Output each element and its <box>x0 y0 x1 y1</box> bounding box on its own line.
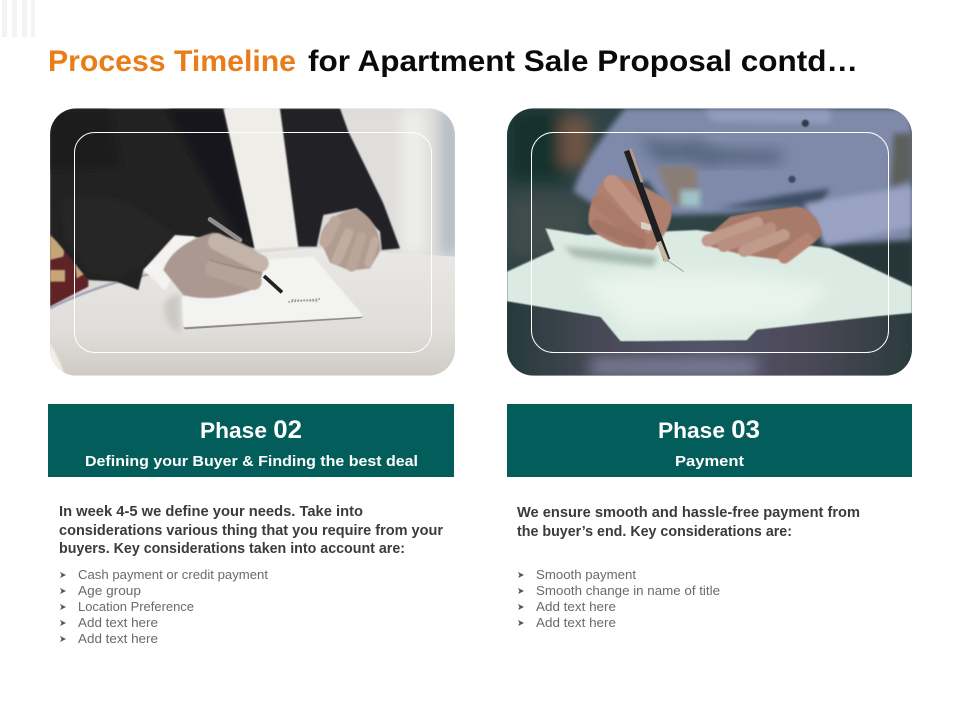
text block: phase 03 description <box>517 505 860 540</box>
subheading: phase 03: Payment <box>675 453 744 470</box>
text block: phase 02 description: In week 4-5 we define your needs. Take into <box>59 504 363 520</box>
bullet list: phase 02 considerations: Add text here <box>78 616 158 630</box>
text block: phase 02 description: buyers. Key considerations taken into account are: <box>59 541 405 557</box>
photo: man writing on paper <box>507 108 912 376</box>
bullet list: phase 02 considerations: Location Preference <box>78 600 194 614</box>
panel: phase 03 banner <box>507 404 912 477</box>
photo: businessman signing a document <box>50 108 455 376</box>
resting hand <box>704 207 822 260</box>
bullet list: phase 02 considerations <box>60 568 269 646</box>
heading: phase 02: Phase 02 <box>200 416 302 444</box>
bullet list: phase 03 considerations: Smooth change in name of title <box>536 584 720 598</box>
title: Process Timeline <box>48 45 296 78</box>
bullet list: phase 03 considerations: Add text here <box>536 600 616 614</box>
bullet list: phase 03 considerations <box>518 568 720 630</box>
text block: phase 02 description: considerations various thing that you require from your <box>59 523 443 539</box>
writing hand <box>163 233 263 298</box>
bullet list: phase 03 considerations: Smooth payment <box>536 568 637 582</box>
text block: phase 02 description <box>59 504 443 557</box>
writing hand <box>588 175 672 250</box>
decorative corner bars <box>2 0 35 37</box>
bullet list: phase 03 considerations: Add text here <box>536 616 616 630</box>
photo frame: left inner outline <box>74 132 432 352</box>
bullet list: phase 02 considerations: Add text here <box>78 632 158 646</box>
title: for Apartment Sale Proposal contd… <box>308 45 858 78</box>
title <box>48 45 858 78</box>
heading: phase 03: Phase 03 <box>658 416 760 444</box>
resting hand <box>320 208 381 271</box>
text block: phase 03 description: the buyer’s end. Key considerations are: <box>517 524 792 540</box>
bullet list: phase 02 considerations: Age group <box>78 584 141 598</box>
subheading: phase 02: Defining your Buyer & Finding the best deal <box>85 453 418 470</box>
bullet list: phase 02 considerations: Cash payment or credit payment <box>78 568 269 582</box>
photo frame: right inner outline <box>532 132 888 352</box>
panel: phase 02 banner <box>48 404 454 477</box>
text block: phase 03 description: We ensure smooth and hassle-free payment from <box>517 505 860 521</box>
